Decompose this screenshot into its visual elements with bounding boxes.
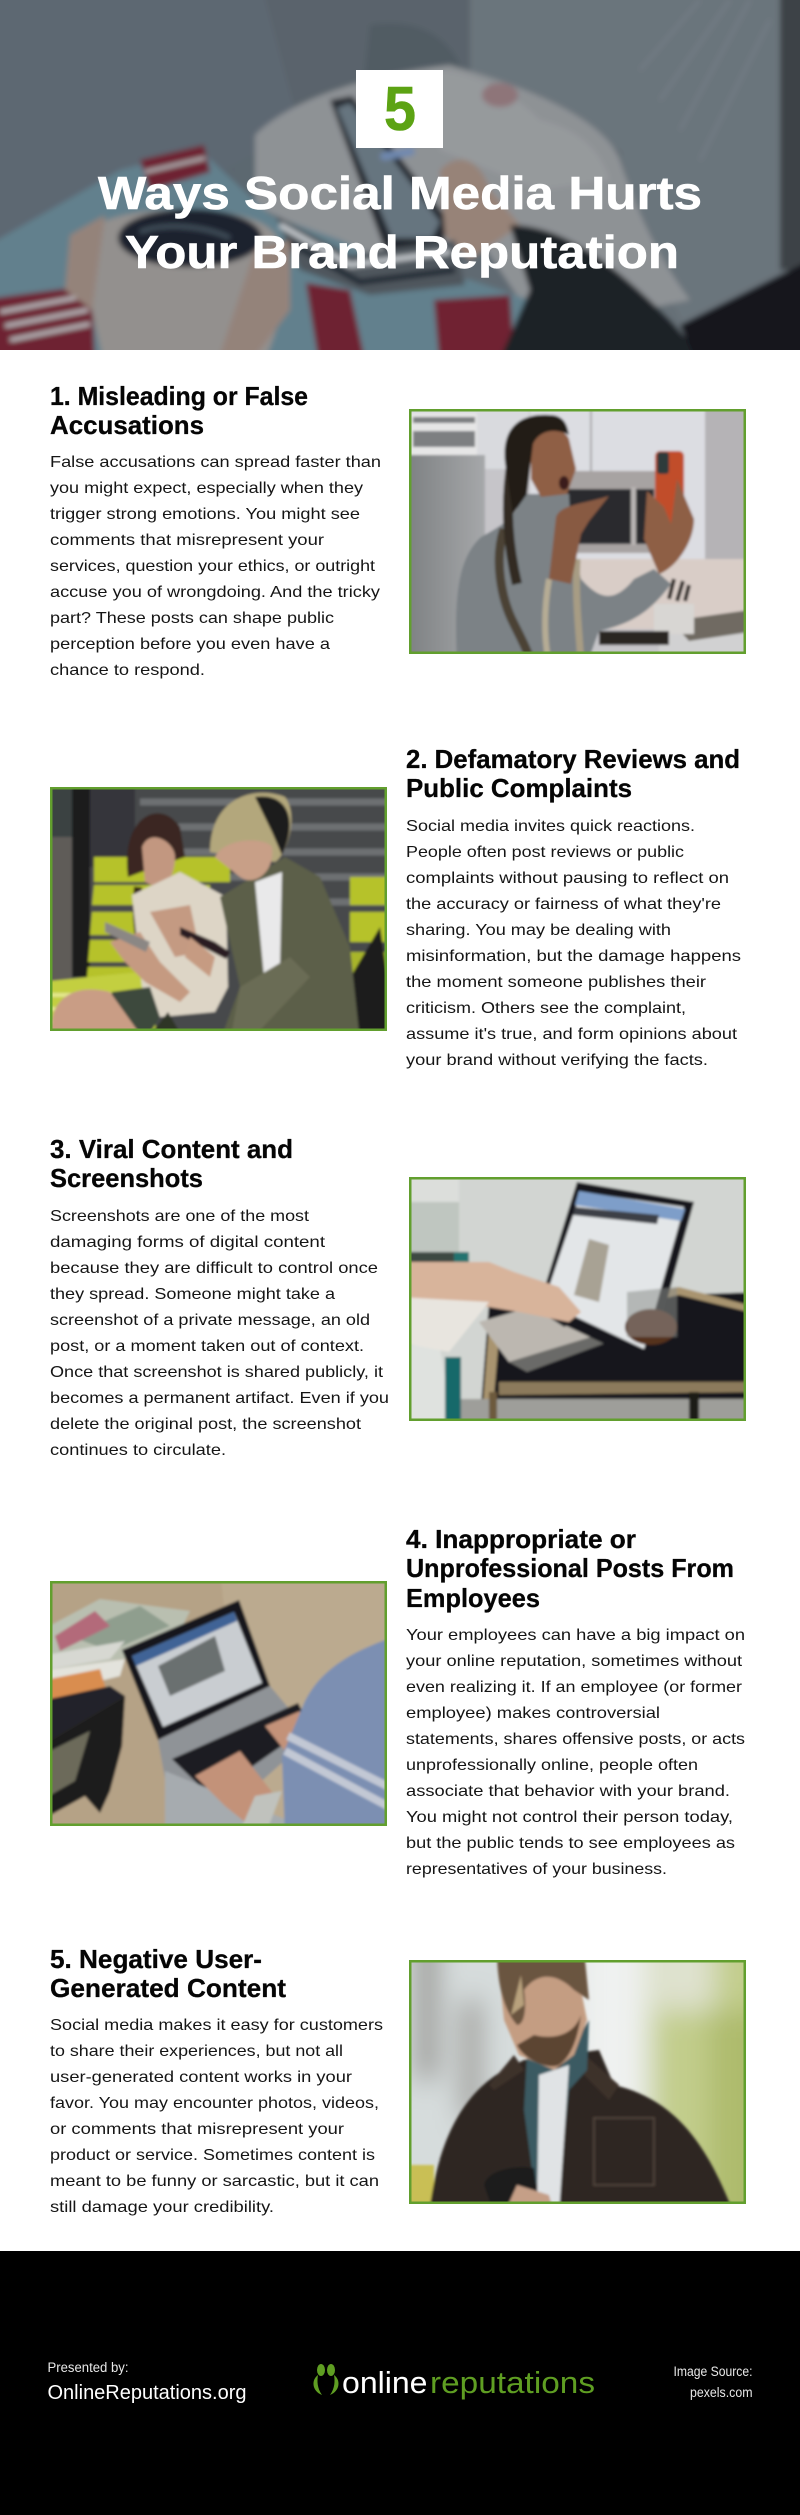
text block: section 3: Screenshots are one of the most [50, 1208, 310, 1225]
panel: section 4 [40, 1524, 745, 1878]
text block: section 2: the accuracy or fairness of what they're [406, 896, 721, 913]
heading: section 1: 1. Misleading or False [50, 381, 308, 411]
presenter credit: Presented by: [48, 2360, 128, 2375]
text block: section 3: they spread. Someone might take a [50, 1286, 335, 1303]
text block: section 1: False accusations can spread faster than [50, 454, 381, 471]
text block: section 3: post, or a moment taken out of context. [50, 1338, 364, 1355]
heading: section 2: 2. Defamatory Reviews and [406, 744, 740, 774]
text block: section 4: You might not control their person today, [406, 1809, 733, 1826]
text block: section 1: comments that misrepresent your [50, 532, 325, 549]
icon: two figures [313, 2364, 339, 2395]
photo: man in dark jacket looking at phone [379, 1930, 776, 2234]
heading: section 5 [50, 1944, 286, 2003]
text block: section 3: screenshot of a private message, an old [50, 1312, 370, 1329]
text block: section 4: Your employees can have a big impact on [406, 1627, 745, 1644]
text block: section 5: favor. You may encounter photos, videos, [50, 2095, 379, 2112]
hero photo: phone, mug and blanket, darkened [0, 0, 800, 350]
wordmark [342, 2365, 595, 2400]
text block: section 3: damaging forms of digital content [50, 1234, 326, 1251]
text block: section 4: unprofessionally online, people often [406, 1757, 698, 1774]
heading: section 3: 3. Viral Content and [50, 1134, 293, 1164]
text block: section 5: still damage your credibility. [50, 2199, 274, 2216]
text block: section 3: delete the original post, the screenshot [50, 1416, 362, 1433]
image source credit: pexels.com [690, 2385, 752, 2400]
text block: section 2: criticism. Others see the complaint, [406, 1000, 686, 1017]
photo: person on laptop with social feed [40, 1571, 397, 1836]
text block: section 2: the moment someone publishes their [406, 974, 707, 991]
text block: section 5 [50, 2017, 383, 2216]
text block: section 1: services, question your ethics, or outright [50, 558, 376, 575]
text block: section 4: representatives of your business. [406, 1861, 667, 1878]
text block: section 1: perception before you even have a [50, 636, 330, 653]
text block: section 5: Social media makes it easy for customers [50, 2017, 383, 2034]
title: Ways Social Media Hurts [98, 167, 702, 219]
text block: section 1: trigger strong emotions. You might see [50, 506, 360, 523]
text block: section 4: your online reputation, sometimes without [406, 1653, 743, 1670]
heading: section 4 [406, 1524, 734, 1613]
heading: section 5: 5. Negative User- [50, 1944, 262, 1974]
text block: section 4 [406, 1627, 745, 1878]
text block: section 1 [50, 454, 381, 679]
presenter credit [48, 2360, 246, 2404]
text block: section 5: meant to be funny or sarcastic, but it can [50, 2173, 379, 2190]
text block: section 5: user-generated content works in your [50, 2069, 353, 2086]
text block: section 2: complaints without pausing to reflect on [406, 870, 729, 887]
heading: section 1: Accusations [50, 410, 204, 440]
heading: section 1 [50, 381, 308, 440]
heading: section 5: Generated Content [50, 1973, 286, 2003]
text block: section 3: becomes a permanent artifact. Even if you [50, 1390, 389, 1407]
text block: section 1: accuse you of wrongdoing. And the tricky [50, 584, 380, 601]
panel: section 3 [50, 1134, 756, 1459]
text block: section 1: chance to respond. [50, 662, 205, 679]
photo: hands typing on laptop at glass table [399, 1167, 756, 1431]
text block: section 4: statements, shares offensive posts, or acts [406, 1731, 745, 1748]
text block: section 5: or comments that misrepresent your [50, 2121, 345, 2138]
presenter credit: OnlineReputations.org [48, 2382, 246, 2404]
text block: section 4: but the public tends to see employees as [406, 1835, 735, 1852]
wordmark: online [342, 2365, 428, 2400]
heading: section 2 [406, 744, 740, 803]
panel: section 1 [50, 381, 756, 679]
text block: section 3: because they are difficult to control once [50, 1260, 378, 1277]
text block: section 2: assume it's true, and form opinions about [406, 1026, 738, 1043]
heading: section 4: Employees [406, 1583, 540, 1613]
text block: section 2: misinformation, but the damage happens [406, 948, 741, 965]
logo [313, 2364, 595, 2400]
text block: section 2: sharing. You may be dealing with [406, 922, 671, 939]
number badge: 5 [384, 75, 416, 144]
number badge [356, 70, 443, 148]
text block: section 3 [50, 1208, 389, 1459]
panel: section 5 [50, 1930, 776, 2234]
text block: section 3: continues to circulate. [50, 1442, 226, 1459]
text block: section 4: even realizing it. If an employee (or former [406, 1679, 743, 1696]
heading: section 3: Screenshots [50, 1163, 203, 1193]
photo: couple on yellow bench with phones [40, 777, 397, 1041]
footer [0, 2251, 800, 2515]
heading: section 2: Public Complaints [406, 773, 632, 803]
text block: section 1: part? These posts can shape public [50, 610, 334, 627]
wordmark: reputations [430, 2365, 595, 2400]
panel: section 2 [40, 744, 741, 1069]
text block: section 1: you might expect, especially when they [50, 480, 363, 497]
heading: section 4: 4. Inappropriate or [406, 1524, 636, 1554]
text block: section 5: product or service. Sometimes content is [50, 2147, 375, 2164]
title [98, 167, 702, 278]
text block: section 4: employee) makes controversial [406, 1705, 660, 1722]
text block: section 4: associate that behavior with your brand. [406, 1783, 730, 1800]
title: Your Brand Reputation [125, 226, 679, 278]
image source credit [674, 2364, 752, 2400]
text block: section 2 [406, 818, 741, 1069]
text block: section 3: Once that screenshot is shared publicly, it [50, 1364, 384, 1381]
image source credit: Image Source: [674, 2364, 752, 2379]
heading: section 3 [50, 1134, 293, 1193]
text block: section 2: People often post reviews or public [406, 844, 684, 861]
heading: section 4: Unprofessional Posts From [406, 1553, 734, 1583]
text block: section 2: Social media invites quick reactions. [406, 818, 695, 835]
text block: section 5: to share their experiences, but not all [50, 2043, 343, 2060]
photo: woman talking at phone in kitchen [399, 399, 756, 664]
hero banner [0, 0, 800, 370]
text block: section 2: your brand without verifying the facts. [406, 1052, 708, 1069]
